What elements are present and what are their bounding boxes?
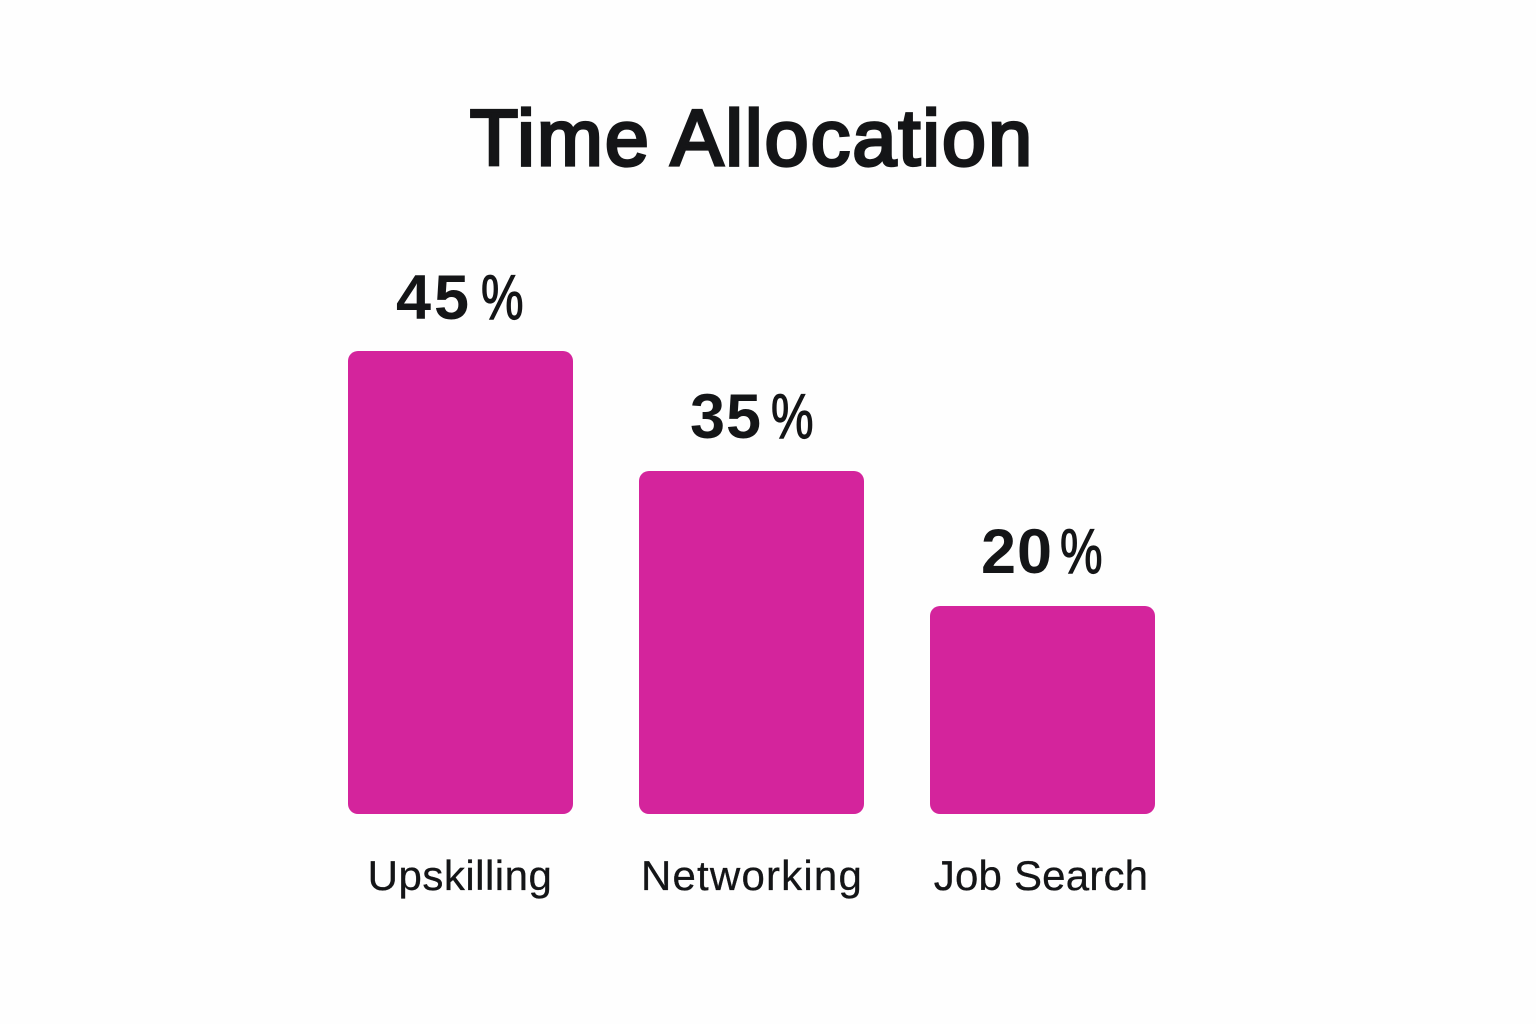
value: Networking 35%: 35 — [690, 382, 762, 452]
label: Networking: Networking — [641, 852, 863, 899]
bar chart — [348, 263, 1155, 899]
label: Upskilling: Upskilling — [368, 852, 552, 899]
bar: Networking — [639, 470, 864, 814]
value: Upskilling 45%: % — [481, 263, 524, 333]
value: Upskilling 45%: 45 — [396, 263, 472, 333]
bar: Job Search — [930, 606, 1154, 814]
label: Job Search: Job Search — [934, 852, 1148, 899]
value: Job Search 20%: 20 — [981, 517, 1053, 587]
value: Networking 35%: % — [771, 382, 814, 452]
bar: Upskilling — [348, 351, 572, 814]
title: Time Allocation — [470, 93, 1034, 182]
value: Networking 35% — [690, 382, 814, 452]
value: Upskilling 45% — [396, 263, 524, 333]
value: Job Search 20%: % — [1060, 517, 1103, 587]
value: Job Search 20% — [981, 517, 1103, 587]
